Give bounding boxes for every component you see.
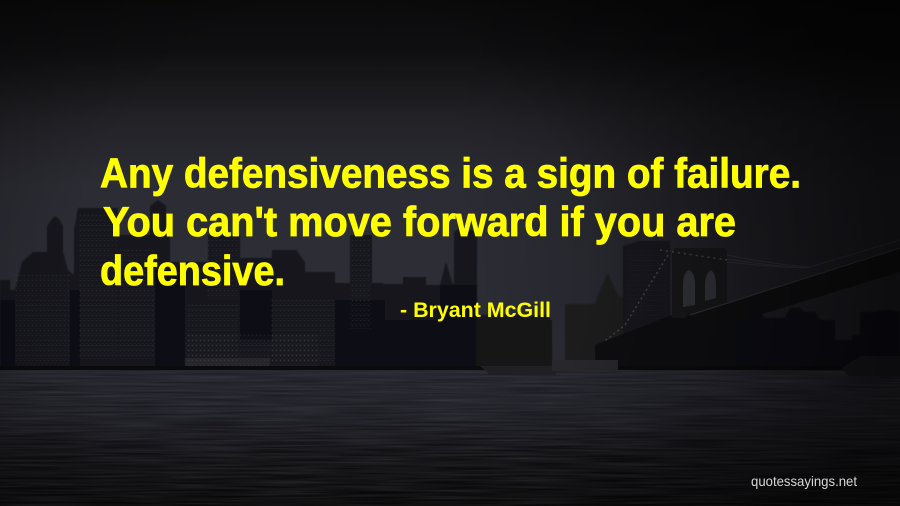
bridge tower	[672, 248, 727, 368]
bridge left approach	[595, 315, 672, 368]
attribution: - Bryant McGill	[400, 299, 551, 322]
shoreline	[0, 366, 900, 371]
quote line 2: You can't move forward if you are	[103, 198, 736, 245]
tower base	[670, 318, 736, 368]
boats	[480, 356, 900, 376]
sky background	[0, 0, 900, 372]
bridge	[595, 240, 900, 368]
bridge arches	[683, 270, 716, 307]
midtown buildings and far domed tower	[476, 241, 670, 368]
watermark: quotessayings.net	[751, 473, 857, 489]
quote line 3: defensive.	[100, 247, 285, 294]
water	[0, 370, 900, 506]
bridge deck	[686, 247, 900, 322]
quote line 1: Any defensiveness is a sign of failure.	[100, 150, 801, 196]
bridge cables	[600, 240, 900, 345]
quote text	[100, 150, 801, 294]
city skyline left	[0, 200, 550, 368]
far right skyline	[727, 308, 900, 368]
